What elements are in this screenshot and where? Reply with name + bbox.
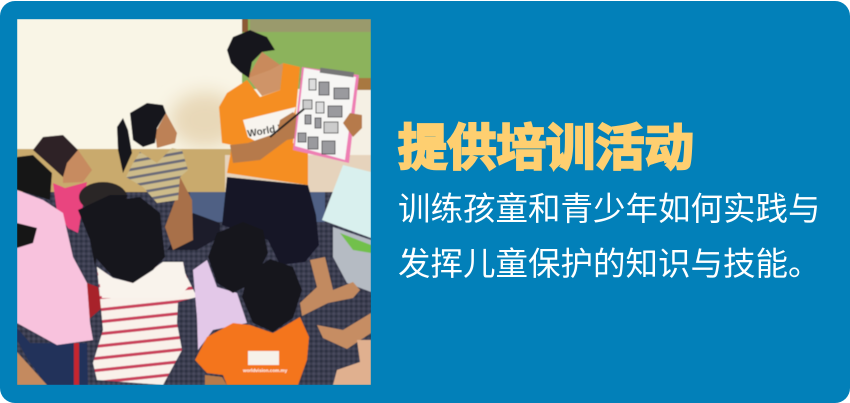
window with green grass (242, 19, 371, 158)
feet on the right (317, 313, 371, 385)
child in pink shirt from behind (17, 155, 93, 385)
shirt logo text: World Vi (247, 122, 288, 140)
girl in pink (33, 135, 92, 233)
heading: 提供培训活动 (398, 121, 694, 176)
girl with ponytail in striped shirt (117, 103, 220, 250)
shirt website text: worldvision.com.my (242, 368, 288, 373)
picture sheet with pink folder (270, 67, 362, 163)
small children in the back (78, 182, 128, 320)
paper and plastic box (322, 165, 371, 292)
text block: description (398, 191, 821, 282)
teacher (219, 30, 319, 265)
child in striped shirt from behind (93, 197, 197, 385)
wall (17, 19, 371, 159)
text block: description: 发挥儿童保护的知识与技能。 (398, 246, 821, 282)
seated child from behind (193, 222, 360, 350)
boy in orange shirt (195, 259, 309, 385)
floor and lower wall (17, 149, 371, 385)
photo: teacher showing picture sheet to children (17, 19, 371, 385)
text block: description: 训练孩童和青少年如何实践与 (398, 191, 821, 227)
